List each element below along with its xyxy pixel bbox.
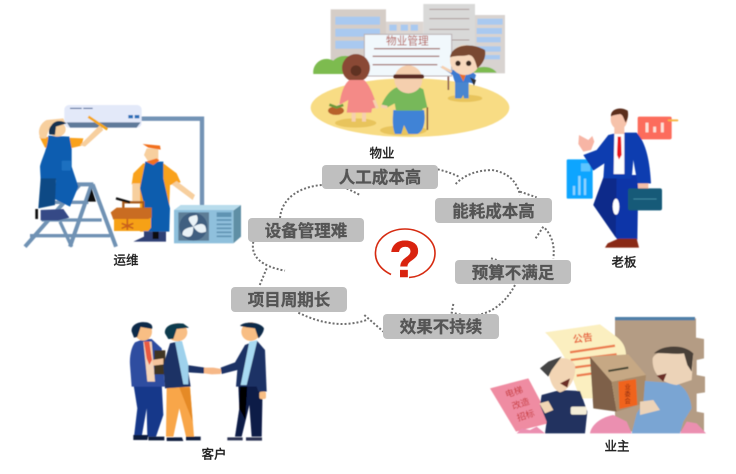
- illustration: property management: [311, 4, 509, 137]
- label: property: 物业: [369, 146, 395, 160]
- worker on ladder: [37, 117, 107, 220]
- tag: labour cost: 人工成本高: [339, 167, 421, 187]
- buildings: [331, 4, 505, 73]
- tag: budget: 预算不满足: [472, 262, 555, 282]
- label: boss: 老板: [611, 254, 637, 270]
- ballot box: 会: [625, 396, 632, 405]
- right businessman: [221, 322, 267, 441]
- resident: [632, 346, 693, 433]
- illustration: maintenance workers: [25, 105, 241, 247]
- ballot box: 委: [625, 389, 632, 398]
- flowers: [517, 415, 706, 433]
- illustration: client handshake: [130, 322, 267, 441]
- pink tender flyer: 招标: [515, 407, 536, 423]
- bushes: [313, 56, 497, 74]
- air conditioner: [64, 105, 142, 128]
- businessman: [578, 109, 662, 248]
- worker with toolbox: [111, 144, 195, 242]
- toolbox: [111, 198, 152, 231]
- illustration: owners and committee: [490, 317, 706, 433]
- blue chart card: [567, 159, 593, 199]
- question mark ring: [375, 229, 435, 278]
- pink tender flyer: [490, 378, 552, 432]
- label: maintenance: 运维: [113, 252, 139, 268]
- tag: labour cost: [322, 165, 438, 189]
- tag: project cycle: 项目周期长: [248, 290, 331, 310]
- property manager: [440, 45, 485, 98]
- ground: [311, 78, 509, 137]
- ballot box: 业: [625, 382, 631, 391]
- label: client: 客户: [201, 446, 227, 462]
- tag: equipment management: [248, 218, 364, 242]
- label: owner: 业主: [604, 440, 630, 454]
- tag: equipment management: 设备管理难: [265, 220, 347, 240]
- left businessman: [130, 322, 165, 440]
- notice board: 物业管理: [386, 34, 429, 47]
- notice board: [364, 34, 452, 90]
- outdoor unit: [174, 205, 241, 243]
- tag: energy cost: 能耗成本高: [452, 201, 535, 221]
- wall: [615, 318, 705, 432]
- man with cane: [381, 65, 427, 134]
- ballot box: [590, 354, 646, 412]
- ladder: [25, 184, 116, 247]
- question mark glyph: ?: [389, 231, 421, 289]
- illustration: boss: [567, 109, 678, 248]
- dotted cloud outline: [253, 169, 554, 332]
- notice paper: 公告: [572, 330, 594, 346]
- pink tender flyer: 电梯: [504, 384, 524, 400]
- tag: lasting effect: [383, 314, 499, 339]
- handshake: [204, 368, 222, 374]
- woman: [328, 54, 377, 122]
- tag: project cycle: [231, 287, 347, 312]
- notice paper: [545, 324, 626, 398]
- copper pipe: [140, 119, 202, 207]
- tag: energy cost: [435, 198, 552, 223]
- tag: lasting effect: 效果不持续: [400, 318, 482, 336]
- guard: [539, 357, 587, 433]
- middle businessman: [163, 323, 205, 441]
- pink tender flyer: 改造: [510, 395, 531, 411]
- central question mark: [375, 229, 435, 289]
- red chart card: [638, 117, 678, 139]
- tag: budget: [455, 260, 571, 284]
